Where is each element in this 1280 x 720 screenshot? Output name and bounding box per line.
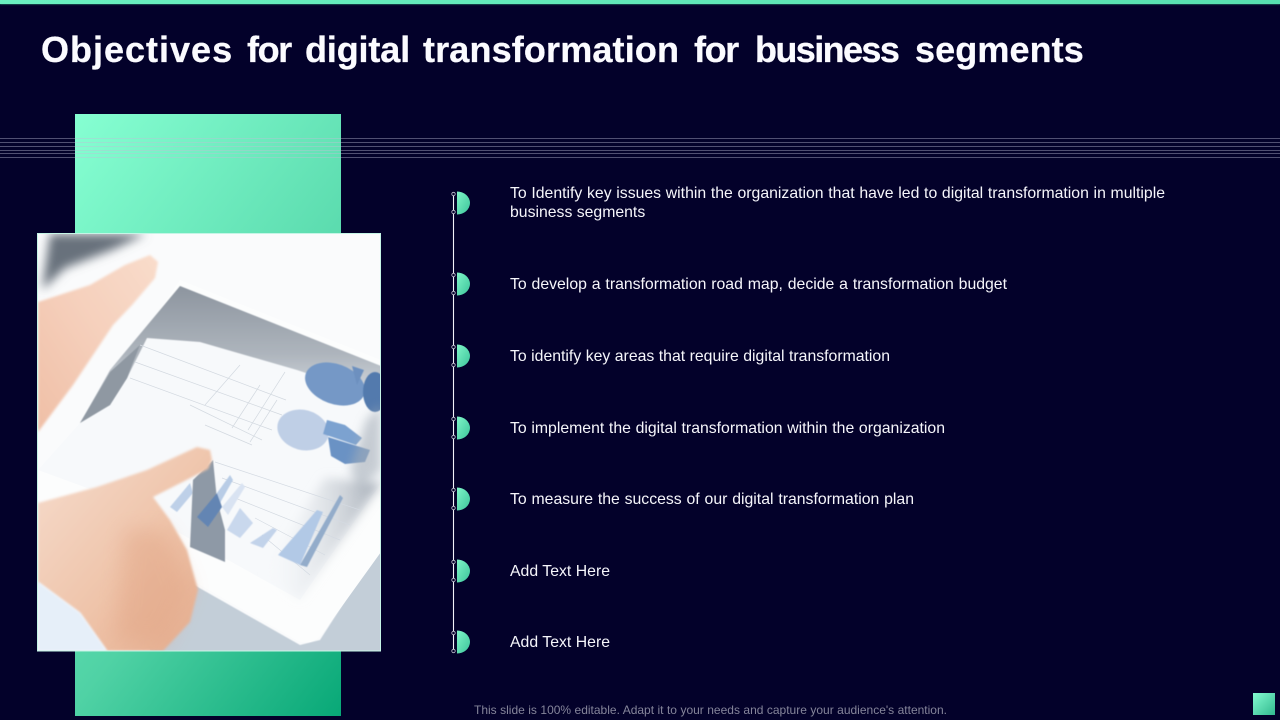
- photo border: [38, 234, 380, 651]
- top accent bar: [0, 0, 1280, 4]
- title: Objectives: [41, 29, 233, 70]
- marker 5: [452, 488, 470, 510]
- corner square icon: [1253, 693, 1275, 715]
- title: for: [247, 29, 291, 70]
- gray shaded corner of screen: [299, 476, 380, 586]
- marker 2: [452, 272, 470, 296]
- photo background: [38, 234, 381, 651]
- title: business: [755, 29, 898, 70]
- gray sliver: [190, 460, 225, 562]
- gray glare right side: [350, 405, 381, 490]
- marker 6: [452, 560, 470, 582]
- hand shading: [118, 528, 182, 637]
- title: [41, 29, 1084, 70]
- marker 3: [452, 344, 470, 368]
- marker 7: [452, 630, 470, 654]
- marker 4: [452, 416, 470, 440]
- objective 2 text: To develop a transformation road map, decide a transformation budget: [510, 276, 1007, 293]
- marker 1: [452, 192, 470, 214]
- title: transformation: [423, 29, 679, 70]
- pie charts: [277, 362, 380, 465]
- title: for: [694, 29, 738, 70]
- title: segments: [915, 29, 1084, 70]
- objective 5 text: To measure the success of our digital transformation plan: [510, 491, 914, 508]
- objective 1 text: [510, 185, 1165, 221]
- bar chart on screen: [170, 475, 343, 567]
- tablet screen: [38, 286, 381, 600]
- chart lines: [215, 462, 360, 575]
- objective 4 text: To implement the digital transformation within the organization: [510, 420, 945, 437]
- tablet body: [334, 546, 380, 617]
- objective 3 text: To identify key areas that require digital transformation: [510, 348, 890, 365]
- dark left edge of screen: [80, 345, 140, 423]
- lower hand: [38, 447, 212, 651]
- objective 1 text: business segments: [510, 204, 645, 221]
- timeline line: [452, 194, 454, 652]
- table grid on screen: [130, 345, 286, 445]
- objective 6 placeholder text: Add Text Here: [510, 563, 610, 580]
- green gradient panel: [75, 114, 341, 716]
- photo: hands using a tablet with charts: [37, 233, 381, 652]
- gray screen glare: [89, 286, 380, 407]
- desk: [150, 545, 381, 651]
- timeline with semicircle markers: [451, 192, 470, 654]
- objective 1 text: To Identify key issues within the organization that have led to digital transformation in multiple: [510, 185, 1165, 202]
- footer note: This slide is 100% editable. Adapt it to your needs and capture your audience's attention.: [474, 703, 947, 717]
- upper hand: [38, 255, 158, 432]
- title: digital: [305, 29, 410, 70]
- dark keyboard band: [42, 234, 146, 290]
- objective 7 placeholder text: Add Text Here: [510, 634, 610, 651]
- shirt sleeve: [38, 582, 107, 651]
